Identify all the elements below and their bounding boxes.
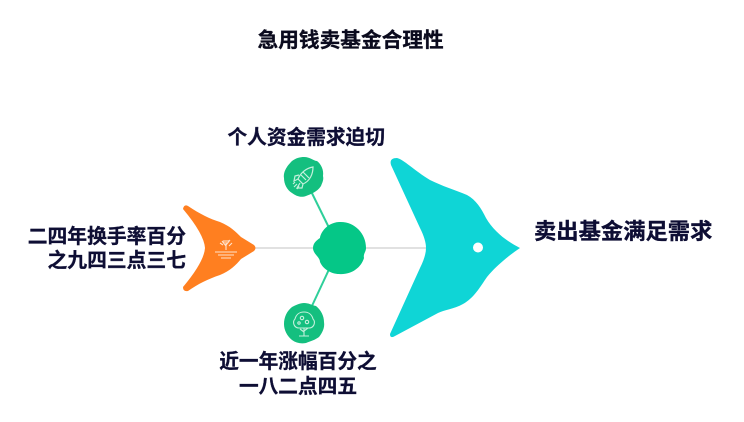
fish tail (183, 205, 256, 291)
icon: tree (294, 312, 314, 336)
icon: rocket (293, 167, 313, 189)
upper branch line (304, 177, 339, 248)
fish eye (473, 242, 483, 252)
label: top cause: 个人资金需求迫切 (228, 127, 385, 149)
title: 急用钱卖基金合理性 (258, 29, 444, 52)
label: left cause (28, 226, 186, 272)
center blob (313, 222, 366, 274)
icon node: rocket (284, 157, 323, 197)
label: bottom cause (219, 350, 377, 398)
label: conclusion: 卖出基金满足需求 (534, 219, 712, 244)
lower branch line (304, 248, 339, 323)
icon: coral (215, 240, 237, 258)
label: left cause: 之九四三点三七 (48, 250, 186, 272)
label: left cause: 二四年换手率百分 (28, 226, 186, 248)
label: bottom cause: 近一年涨幅百分之 (219, 351, 377, 373)
fish head (390, 158, 520, 337)
spine line (250, 247, 428, 249)
icon node: tree (284, 303, 324, 343)
label: bottom cause: 一八二点四五 (239, 376, 357, 398)
